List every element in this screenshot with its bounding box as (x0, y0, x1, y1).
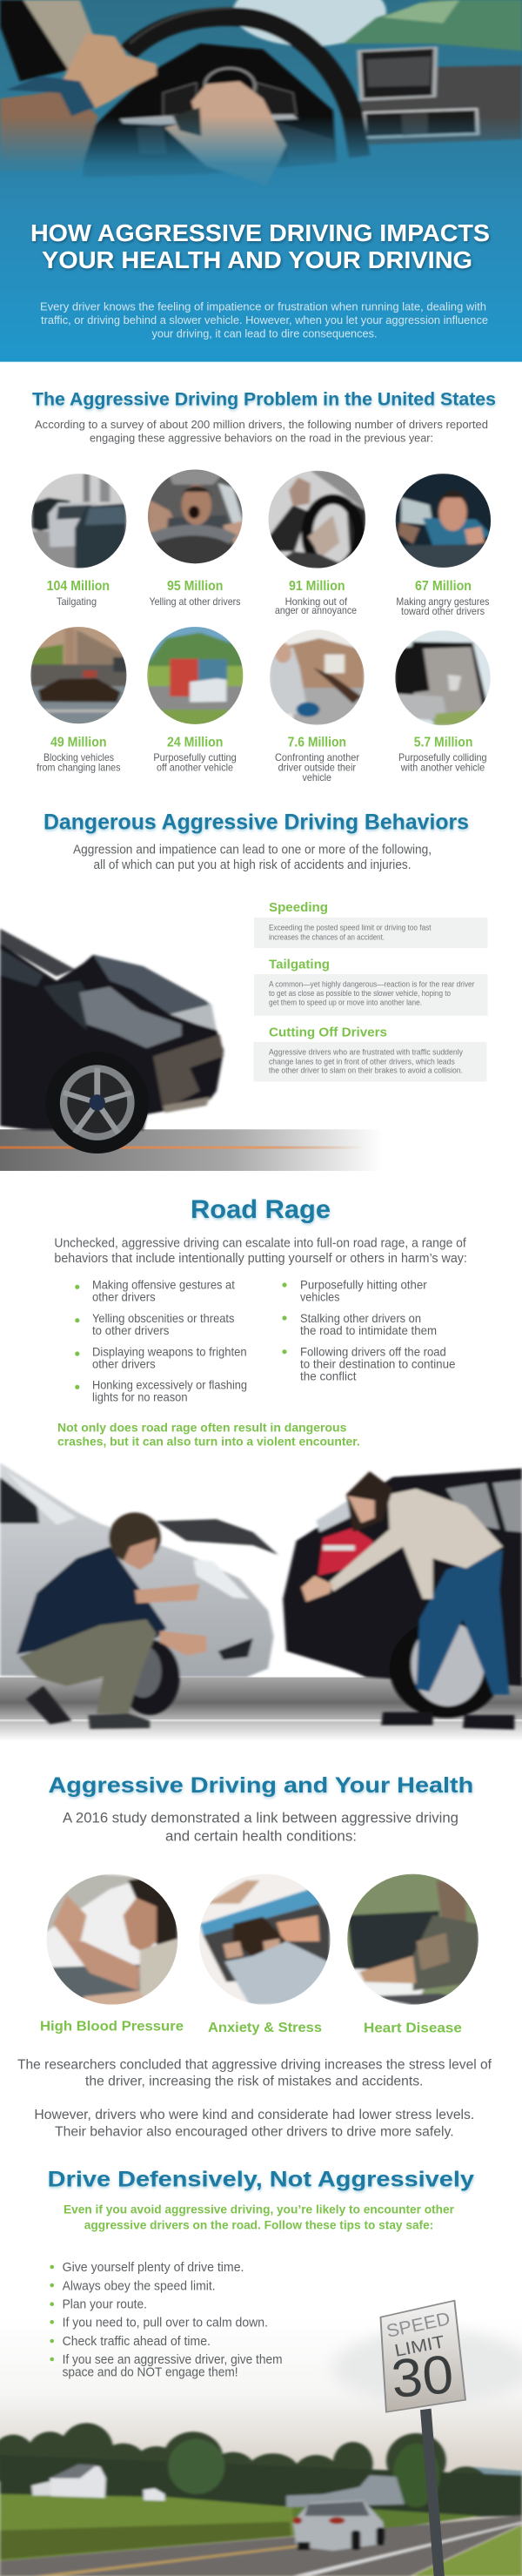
intro paragraph: engaging these aggressive behaviors on the road in the previous year: (90, 432, 433, 444)
bullet list: right column: Following drivers off the road (300, 1344, 446, 1358)
statistics labels (37, 579, 489, 784)
bullet list: left column: other drivers (92, 1356, 156, 1370)
intro paragraph: According to a survey of about 200 million drivers, the following number of drivers reported (35, 418, 488, 431)
panel: road rage (0, 1195, 522, 1741)
bullet list: left column: Yelling obscenities or threats (92, 1311, 234, 1325)
tips list: space and do NOT engage them! (63, 2365, 238, 2379)
behavior: tailgating: Tailgating (269, 958, 330, 972)
stat: 67 million (396, 579, 489, 617)
behavior: cutting off drivers: the other driver to slam on their brakes to avoid a collision. (269, 1066, 463, 1075)
stat: 91 million: 91 Million (289, 579, 345, 594)
stat: 49 million (37, 735, 120, 773)
intro paragraph (35, 418, 488, 444)
behavior: tailgating: A common—yet highly dangerous—reaction is for the rear driver (269, 979, 474, 988)
stat: 24 million: off another vehicle (157, 761, 233, 773)
tips list: Check traffic ahead of time. (63, 2335, 211, 2349)
intro text: your driving, it can lead to dire consequences. (151, 327, 378, 340)
hero photo: hands on steering wheel (0, 0, 522, 362)
intro text (40, 299, 488, 340)
tips list: Always obey the speed limit. (63, 2279, 216, 2293)
photo: wrecked car (0, 929, 383, 1171)
stat: 24 million (153, 735, 237, 773)
stat: 95 million (150, 579, 240, 608)
bullet list: right column: to their destination to continue (300, 1356, 456, 1370)
paragraph (63, 1809, 458, 1844)
paragraph: A 2016 study demonstrated a link between aggressive driving (63, 1809, 458, 1826)
behavior: speeding (254, 900, 487, 948)
stat: 24 million: 24 Million (167, 735, 223, 750)
icon: tailgating photo (30, 473, 128, 568)
bullet list: right column: Stalking other drivers on (300, 1311, 421, 1325)
paragraph (73, 843, 432, 872)
behavior: cutting off drivers (254, 1026, 487, 1081)
photo: rural road with speed limit sign (0, 2301, 522, 2576)
bullet list: left column: other drivers (92, 1290, 156, 1304)
photo circles, row 1 and row 2 (30, 468, 492, 727)
sign text: LIMIT (393, 2332, 446, 2361)
paragraph: behaviors that include intentionally putting yourself or others in harm’s way: (54, 1251, 467, 1266)
icon: honking photo (266, 470, 368, 568)
stat: 7.6 million: driver outside their (278, 761, 356, 773)
green intro (64, 2203, 455, 2231)
stat: 104 million: Tailgating (57, 595, 97, 608)
photo: two drivers inspecting damage (0, 1463, 522, 1741)
panel: the aggressive driving problem (30, 390, 496, 784)
intro text: Every driver knows the feeling of impatience or frustration when running late, dealing with (40, 299, 486, 313)
stat: 91 million (275, 579, 357, 616)
stat: 67 million: 67 Million (415, 579, 472, 594)
icon: mirror collision photo (394, 629, 492, 727)
condition labels: Anxiety & Stress (208, 2021, 322, 2035)
heading: Drive Defensively, Not Aggressively (48, 2168, 474, 2192)
bullet list: left column: Making offensive gestures at (92, 1278, 235, 1292)
conclusion text: However, drivers who were kind and considerate had lower stress levels. (34, 2108, 474, 2122)
stat: 5.7 million: 5.7 Million (414, 735, 472, 750)
callout (57, 1420, 360, 1448)
condition labels: Heart Disease (364, 2021, 462, 2036)
stat: 91 million: anger or annoyance (275, 604, 357, 616)
stat: 49 million: 49 Million (50, 735, 106, 750)
behavior: tailgating: get them to speed up or move into another lane. (269, 998, 422, 1006)
stat: 49 million: from changing lanes (37, 761, 120, 773)
bullet list: right column: Purposefully hitting other (300, 1278, 427, 1292)
heading: Aggressive Driving and Your Health (49, 1773, 473, 1798)
stat: 67 million: Making angry gestures (396, 595, 489, 608)
heading: Dangerous Aggressive Driving Behaviors (44, 810, 469, 834)
title: HOW AGGRESSIVE DRIVING IMPACTS (30, 219, 490, 246)
behavior: speeding: Exceeding the posted speed limit or driving too fast (269, 923, 432, 932)
callout: Not only does road rage often result in dangerous (57, 1420, 347, 1434)
behavior: speeding: Speeding (269, 900, 328, 915)
heading: Road Rage (191, 1195, 331, 1224)
stat: 95 million: Yelling at other drivers (150, 595, 240, 608)
paragraph: Unchecked, aggressive driving can escalate into full-on road rage, a range of (54, 1235, 467, 1250)
behavior: speeding: increases the chances of an accident. (269, 932, 385, 941)
paragraph: Aggression and impatience can lead to one or more of the following, (73, 843, 432, 857)
icon: yelling driver photo (146, 468, 244, 566)
panel: dangerous aggressive driving behaviors (0, 810, 487, 1171)
icon: blocking lanes photo (30, 625, 128, 725)
bullet list: left column: to other drivers (92, 1323, 169, 1337)
photo circles: health conditions (45, 1872, 479, 2005)
icon: high blood pressure photo (45, 1872, 180, 2005)
bullet list: left column: Honking excessively or flashing (92, 1378, 247, 1392)
stat: 5.7 million: Purposefully colliding (398, 751, 487, 763)
icon: cutting off photo (146, 625, 244, 725)
stat: 104 million (47, 579, 110, 608)
stat: 7.6 million: vehicle (303, 771, 331, 784)
icon: angry gestures photo (394, 473, 492, 568)
stat: 7.6 million (275, 735, 359, 784)
stat: 67 million: toward other drivers (401, 605, 485, 617)
panel: drive defensively (0, 2168, 522, 2576)
conclusion text: Their behavior also encouraged other drivers to drive more safely. (55, 2124, 454, 2139)
behavior: tailgating (254, 958, 487, 1016)
stat: 24 million: Purposefully cutting (153, 751, 237, 763)
panel: aggressive driving and your health (17, 1773, 492, 2139)
tips list: Plan your route. (63, 2298, 147, 2312)
sign text (385, 2309, 456, 2410)
callout: crashes, but it can also turn into a violent encounter. (57, 1434, 360, 1448)
stat: 95 million: 95 Million (167, 579, 223, 594)
behavior: tailgating: to get as close as possible to the slower vehicle, hoping to (269, 989, 451, 998)
stat: 104 million: 104 Million (47, 579, 110, 594)
paragraph: and certain health conditions: (165, 1827, 357, 1844)
bullet list: right column: the road to intimidate them (300, 1323, 437, 1337)
panel: hero header (0, 0, 522, 362)
icon: anxiety and stress photo (198, 1873, 331, 2005)
green intro: Even if you avoid aggressive driving, you’re likely to encounter other (64, 2203, 455, 2216)
paragraph (54, 1235, 467, 1266)
green intro: aggressive drivers on the road. Follow these tips to stay safe: (84, 2217, 433, 2231)
conclusion text: the driver, increasing the risk of mistakes and accidents. (85, 2074, 423, 2088)
conclusion text: The researchers concluded that aggressive driving increases the stress level of (17, 2058, 492, 2073)
bullet list: left column: lights for no reason (92, 1390, 188, 1404)
intro text: traffic, or driving behind a slower vehicle. However, when you let your aggression influence (41, 313, 488, 326)
behavior: cutting off drivers: Aggressive drivers who are frustrated with traffic suddenly (269, 1048, 463, 1057)
title (30, 219, 490, 273)
condition labels (40, 2019, 462, 2036)
behavior: cutting off drivers: change lanes to get in front of other drivers, which leads (269, 1057, 455, 1066)
paragraph: all of which can put you at high risk of accidents and injuries. (94, 858, 411, 872)
tips list: If you need to, pull over to calm down. (63, 2317, 268, 2331)
stat: 5.7 million: with another vehicle (400, 761, 485, 773)
icon: heart disease photo (346, 1873, 479, 2005)
tips list: If you see an aggressive driver, give them (63, 2353, 282, 2367)
stat: 49 million: Blocking vehicles (44, 751, 114, 763)
behavior: cutting off drivers: Cutting Off Drivers (269, 1026, 387, 1039)
sign text: 30 (389, 2344, 456, 2410)
icon: confronting photo (268, 629, 366, 727)
bullet list: right column: vehicles (300, 1290, 339, 1304)
condition labels: High Blood Pressure (40, 2019, 184, 2034)
stat: 7.6 million: 7.6 Million (288, 735, 346, 750)
stat: 7.6 million: Confronting another (275, 751, 359, 763)
stat: 91 million: Honking out of (285, 595, 348, 608)
bullet list: left column: Displaying weapons to frighten (92, 1344, 247, 1358)
heading: The Aggressive Driving Problem in the United States (32, 390, 496, 409)
tips list (50, 2261, 283, 2379)
conclusion text (17, 2058, 492, 2139)
tips list: Give yourself plenty of drive time. (63, 2261, 244, 2275)
stat: 5.7 million (398, 735, 487, 773)
bullet list: right column: the conflict (300, 1369, 357, 1382)
sign text: SPEED (385, 2309, 452, 2342)
bullet list: left column (75, 1278, 247, 1404)
title: YOUR HEALTH AND YOUR DRIVING (42, 246, 472, 273)
bullet list: right column (282, 1278, 456, 1382)
